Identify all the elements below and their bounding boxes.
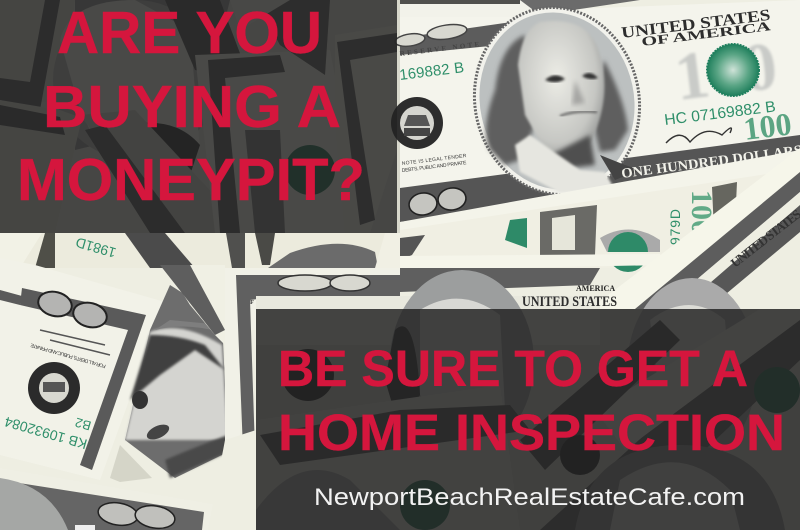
heading: are you buying a moneypit: ARE YOU: [57, 0, 322, 66]
heading: be sure to get a home inspection: BE SURE TO GET A: [278, 340, 748, 397]
title words: United States of America: [620, 7, 772, 49]
heading: be sure to get a home inspection: HOME INSPECTION: [278, 404, 785, 461]
folded bill, lower left: B2: [73, 415, 93, 434]
bottom-left bill: [0, 468, 218, 530]
seal: [28, 362, 80, 414]
title words: United States of America: OF AMERICA: [641, 18, 772, 49]
green seal: [707, 44, 759, 96]
legal tender text: NOTE IS LEGAL TENDER: [402, 153, 467, 167]
website url: NewportBeachRealEstateCafe.com: [314, 484, 745, 511]
title words: United States of America: UNITED STATES: [620, 7, 771, 42]
right serial number: HC 07169882 B: [663, 98, 777, 129]
heading: are you buying a moneypit: [17, 0, 365, 213]
bill behind portrait: [160, 265, 400, 456]
signature and legal text: [40, 330, 110, 355]
green seal under panel: [754, 367, 800, 413]
lower-left bill under panel: [256, 385, 520, 530]
main bill with Franklin portrait: DEBTS, PUBLIC AND PRIVATE: [402, 160, 467, 174]
portrait: Benjamin Franklin: [457, 0, 657, 210]
main bill with Franklin portrait: [391, 0, 800, 228]
signature: [666, 128, 731, 143]
strip of bills below the top panel: [0, 233, 400, 268]
heading: are you buying a moneypit: BUYING A: [43, 74, 341, 140]
bill under the main bill: 979D: [667, 209, 683, 245]
heading: are you buying a moneypit: MONEYPIT?: [17, 147, 365, 213]
top-center title words: UNITED STATES: [522, 294, 617, 310]
bill under the main bill: [400, 150, 800, 272]
folded bill, lower left: [0, 258, 165, 480]
bills around and beneath the bottom panel: AMERICA: [576, 284, 615, 293]
twisted Franklin portrait: [110, 285, 228, 482]
green 100: 100: [741, 105, 793, 147]
diagonal band under panel: [540, 320, 800, 530]
lower 100 numerals: [408, 186, 467, 217]
ghost 100 numeral: 100: [671, 27, 781, 115]
bills around and beneath the bottom panel: [208, 268, 800, 530]
diagonal bills, right: [590, 148, 800, 309]
left portrait: [390, 270, 534, 454]
treasury seal: [391, 97, 443, 149]
panel: top-left dark overlay: [0, 0, 397, 233]
100 numerals: [278, 275, 370, 291]
green serial: 1981D: [74, 234, 118, 261]
bills beneath the top-left panel: [0, 0, 400, 240]
folded bill, lower left: FOR ALL DEBTS, PUBLIC AND PRIVATE: [29, 341, 107, 369]
heading: be sure to get a home inspection: [278, 340, 785, 461]
top 100 ovals: [394, 22, 468, 48]
left serial number: 169882 B: [398, 59, 465, 84]
band text: one hundred dollars: ONE HUNDRED DOLLARS: [621, 143, 800, 182]
serial number: KB 10932084: [3, 414, 89, 452]
note caption: RESERVE NOTE: [399, 40, 480, 58]
panel: bottom-right dark overlay: [256, 309, 800, 530]
federal reserve note caption: FEDERAL RESERVE NOTE: [250, 299, 380, 306]
bill under the main bill: 100: [685, 190, 718, 235]
right portrait: [627, 278, 757, 462]
upside-down 100 ovals: [36, 288, 109, 331]
bottom portrait under panel: [575, 445, 785, 530]
